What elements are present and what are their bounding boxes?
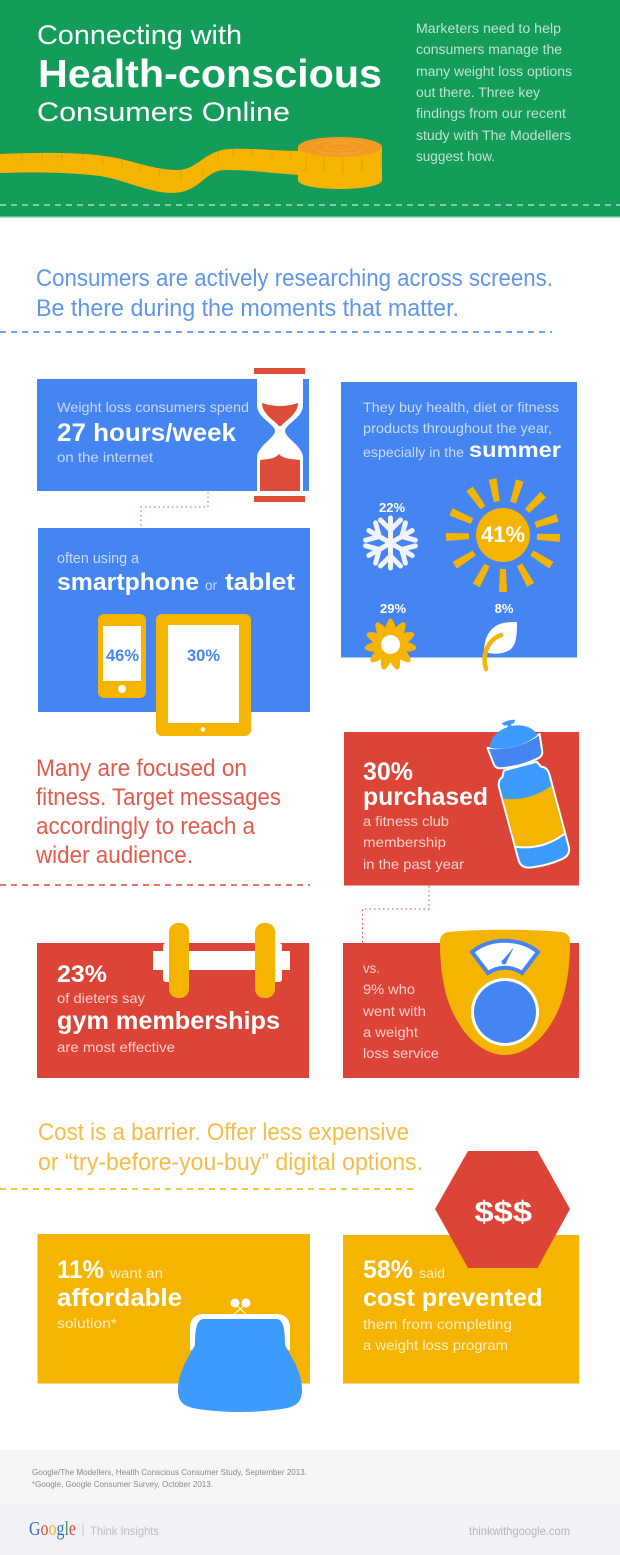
intro text: many weight loss options [416, 64, 572, 79]
winter 22% [364, 500, 417, 568]
heading: cost is a barrier: or “try-before-you-buy” digital options. [38, 1149, 423, 1176]
icon: leaf [484, 622, 517, 669]
panel text: gym memberships [57, 1007, 280, 1035]
intro text: suggest how. [416, 149, 495, 164]
intro text: Marketers need to help [416, 21, 561, 36]
icon: smartphone 46% [98, 614, 146, 698]
panel text: vs. [363, 960, 380, 976]
panel text: want an [109, 1265, 163, 1281]
panel: seasons [341, 382, 577, 671]
heading: focused on fitness: wider audience. [35, 842, 193, 869]
icon: price hexagon: $$$ [474, 1196, 532, 1229]
heading: research across screens: Be there during the moments that matter. [36, 295, 459, 322]
icon: price hexagon [435, 1151, 570, 1268]
panel text [57, 551, 295, 596]
panel text: are most effective [57, 1039, 175, 1055]
panel text: products throughout the year, [363, 420, 552, 436]
summer sun 41%: 41% [481, 522, 525, 547]
title: Connecting with [37, 20, 242, 50]
icon: bathroom scale [440, 930, 570, 1055]
panel text: loss service [363, 1045, 439, 1061]
panel text: smartphone [57, 569, 199, 596]
intro text: out there. Three key [416, 85, 540, 100]
panel text: 27 hours/week [57, 419, 236, 447]
panel text [362, 960, 439, 1061]
url: thinkwithgoogle.com [469, 1524, 570, 1538]
panel text: tablet [225, 569, 295, 596]
panel: 30% purchased [344, 714, 579, 886]
panel text: went with [362, 1003, 426, 1019]
panel text: in the past year [363, 856, 464, 872]
panel text: a weight [363, 1024, 418, 1040]
panel text: affordable [57, 1284, 182, 1312]
title: Consumers Online [37, 97, 290, 127]
panel text: cost prevented [363, 1284, 542, 1312]
panel: 23% gym memberships [37, 923, 309, 1078]
heading: research across screens [36, 265, 553, 322]
panel text [57, 961, 280, 1055]
title: Health-conscious [38, 53, 382, 96]
panel text: summer [469, 439, 561, 462]
panel text: them from completing [363, 1316, 512, 1332]
icon: water bottle [482, 714, 573, 872]
panel text: a weight loss program [363, 1337, 508, 1353]
panel: 58% cost prevented [343, 1151, 579, 1384]
panel text: membership [363, 834, 446, 850]
spring flower 29% [364, 601, 417, 671]
heading: focused on fitness: fitness. Target messages [36, 784, 281, 811]
panel text: often using a [57, 551, 140, 567]
heading: research across screens: Consumers are actively researching across screens. [36, 265, 553, 292]
icon: snowflake [364, 518, 417, 568]
panel text [363, 758, 488, 872]
panel text: on the internet [57, 449, 153, 465]
panel text: Weight loss consumers spend [57, 399, 249, 415]
intro text [416, 21, 572, 164]
icon: dumbbell [153, 923, 290, 998]
panel: header [0, 0, 620, 218]
autumn leaf 8%: 8% [495, 601, 514, 616]
title [37, 20, 382, 127]
icon: tablet 30%: 30% [187, 646, 220, 665]
intro text: findings from our recent [416, 106, 566, 121]
panel text: 23% [57, 961, 107, 988]
panel text: a fitness club [363, 813, 449, 829]
heading: focused on fitness: accordingly to reach a [36, 813, 256, 840]
panel: sources: *Google, Google Consumer Survey, October 2013. [32, 1480, 213, 1489]
panel text [57, 1256, 182, 1331]
heading: cost is a barrier [38, 1119, 423, 1176]
panel: 9% weight loss service [343, 930, 579, 1078]
icon: smartphone 46%: 46% [106, 646, 139, 665]
icon: hourglass [254, 368, 305, 502]
heading: focused on fitness [35, 755, 281, 869]
panel text: especially in the [363, 444, 464, 460]
logo: Google Think Insights: Think Insights [90, 1524, 159, 1538]
icon: measuring tape [0, 137, 382, 193]
intro text: study with The Modellers [416, 128, 571, 143]
logo: Google Think Insights: Google [29, 1518, 76, 1540]
panel text: 9% who [363, 981, 415, 997]
icon: coin purse [178, 1298, 302, 1412]
heading: focused on fitness: Many are focused on [36, 755, 247, 782]
intro text: consumers manage the [416, 42, 562, 57]
panel: 11% affordable [38, 1234, 310, 1412]
panel text [363, 1256, 542, 1353]
panel text [57, 399, 249, 465]
panel: sources [0, 1450, 620, 1507]
spring flower 29%: 29% [380, 601, 406, 616]
panel text: of dieters say [57, 990, 145, 1006]
winter 22%: 22% [379, 500, 405, 515]
panel text [363, 399, 561, 462]
panel: smartphone or tablet [38, 528, 310, 736]
logo: Google Think Insights [29, 1518, 159, 1540]
panel text: They buy health, diet or fitness [363, 399, 559, 415]
panel: 27 hours per week [37, 368, 309, 502]
panel text: 11% [57, 1256, 104, 1284]
panel text: solution* [57, 1315, 118, 1331]
panel text: said [419, 1265, 445, 1281]
autumn leaf 8% [484, 601, 517, 669]
panel text: 30% [363, 758, 413, 786]
summer sun 41% [446, 478, 560, 592]
panel: footer [0, 1505, 620, 1555]
icon: tablet 30% [156, 614, 251, 736]
panel text: or [205, 577, 217, 593]
panel text: 58% [363, 1256, 413, 1284]
panel: sources: Google/The Modellers, Health Conscious Consumer Study, September 2013. [32, 1468, 307, 1477]
panel text: purchased [363, 783, 488, 811]
icon: flower [364, 618, 417, 671]
heading: cost is a barrier: Cost is a barrier. Offer less expensive [38, 1119, 409, 1146]
